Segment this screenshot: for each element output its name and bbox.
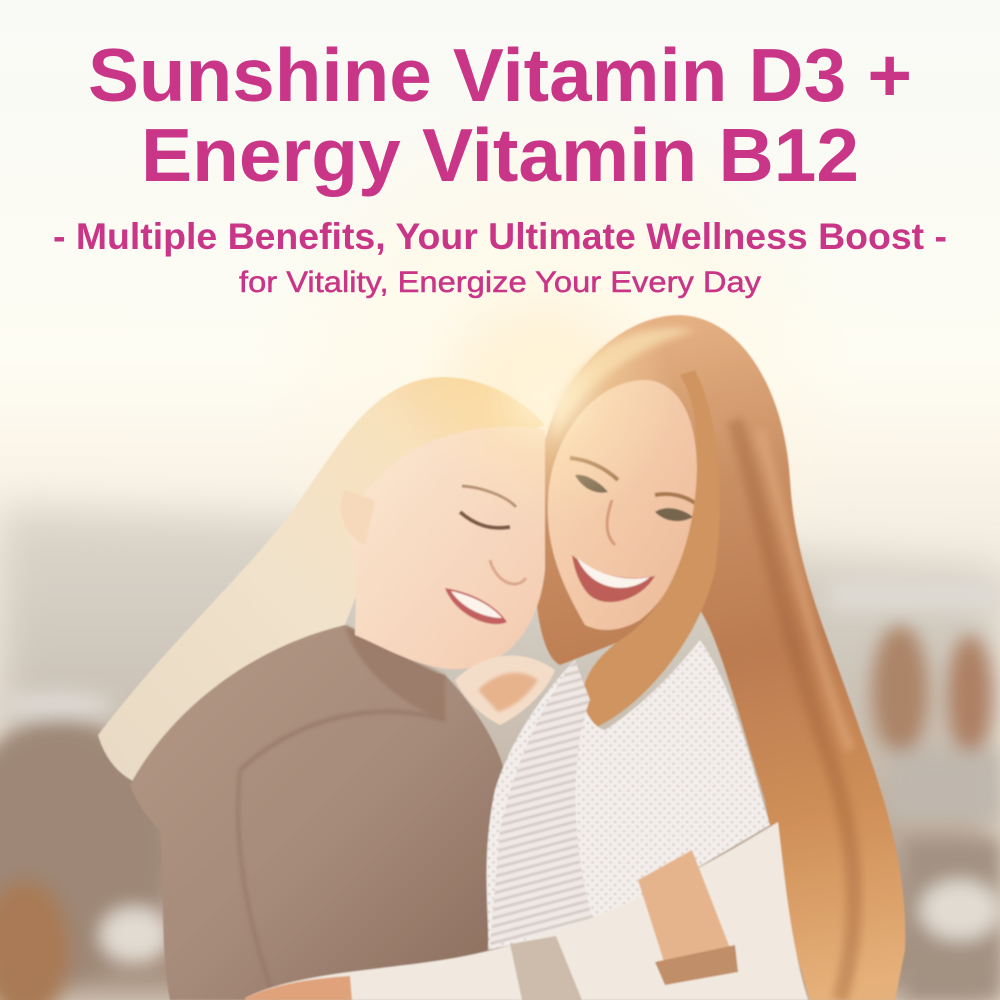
white knit sweater <box>487 640 770 950</box>
left woman's sleeve cuff <box>455 656 555 725</box>
title <box>88 33 912 197</box>
subtitle: - Multiple Benefits, Your Ultimate Wellness Boost - <box>53 216 947 257</box>
tagline: for Vitality, Energize Your Every Day <box>239 266 761 299</box>
title: Sunshine Vitamin D3 + <box>88 33 912 117</box>
photo: two smiling women embracing <box>98 260 905 1000</box>
left woman's face <box>341 426 545 669</box>
right woman's front hair lock <box>582 370 720 730</box>
right woman's hair <box>534 315 905 1000</box>
left woman's hoodie <box>130 625 505 1000</box>
left woman's hair <box>98 377 545 782</box>
sunlight glow <box>400 260 700 540</box>
title: Energy Vitamin B12 <box>141 113 859 197</box>
striped scarf <box>245 822 808 1000</box>
right woman's face <box>548 380 697 630</box>
